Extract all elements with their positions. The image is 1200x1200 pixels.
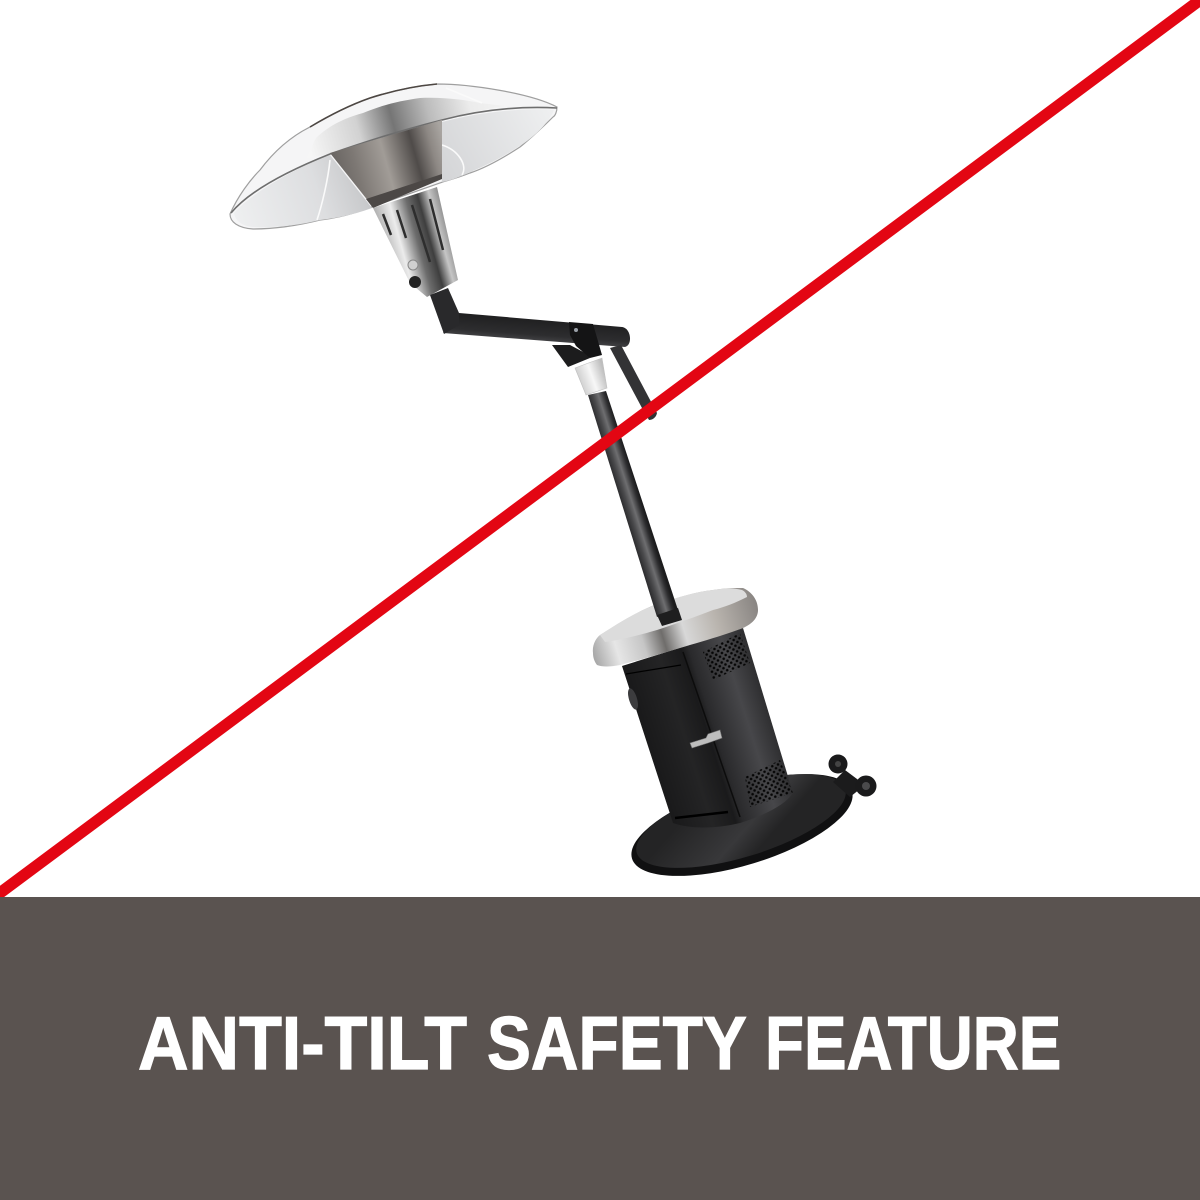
control knob	[409, 276, 421, 288]
cone slots	[383, 199, 443, 262]
collar top surface	[600, 588, 747, 642]
door bottom slot	[675, 812, 728, 818]
plate top face	[626, 755, 856, 887]
title	[138, 1001, 1061, 1085]
lower burner cone	[373, 187, 458, 297]
bottom perforation	[745, 760, 793, 807]
door seam	[683, 652, 740, 817]
silver coupling	[575, 358, 607, 395]
pivot bracket	[552, 322, 602, 367]
shade interior right	[442, 110, 554, 182]
main pole	[588, 391, 682, 626]
reflector shade	[230, 84, 557, 297]
door top slot	[626, 665, 681, 674]
shade back and outline	[230, 84, 557, 229]
door latch	[690, 730, 722, 748]
title: SAFETY	[487, 1001, 747, 1085]
hood band	[366, 174, 442, 208]
upper arm	[430, 288, 630, 347]
red tilt line	[0, 0, 1200, 900]
shade interior left	[234, 155, 372, 227]
rim lines	[231, 108, 557, 213]
title: ANTI-TILT	[138, 1001, 467, 1085]
base plate	[620, 753, 864, 897]
top perforation	[703, 633, 750, 680]
dome	[307, 98, 505, 158]
caption band	[0, 897, 1200, 1200]
burner hood	[330, 120, 442, 207]
steel top collar	[593, 588, 758, 666]
wheels	[828, 754, 876, 797]
handle hole	[626, 687, 640, 711]
title: FEATURE	[765, 1001, 1061, 1085]
support strut	[610, 345, 657, 420]
cylinder housing	[622, 628, 793, 828]
pole foot	[657, 608, 682, 626]
